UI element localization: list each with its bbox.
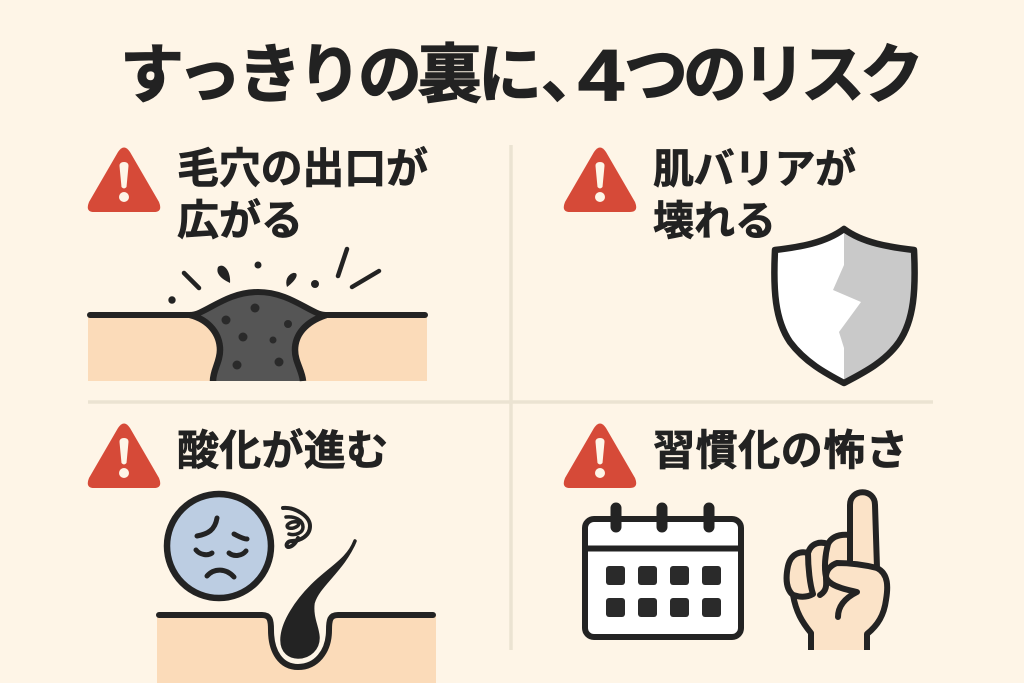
- heading: skin barrier: 肌バリアが: [653, 146, 856, 192]
- panel: skin barrier: [564, 146, 915, 383]
- heading: oxidation: 酸化が進む: [177, 427, 388, 474]
- illustration: enlarged pore: [88, 249, 427, 381]
- icon: warning triangle 3: [88, 424, 160, 488]
- heading: habit: 習慣化の怖さ: [653, 427, 908, 474]
- illustration: skin with hair follicle: [157, 541, 436, 683]
- title: つのリスク: [624, 39, 924, 111]
- icon: calendar: [585, 508, 741, 637]
- panel: oxidation: [88, 424, 436, 683]
- icon: warning triangle 4: [564, 424, 636, 488]
- title: すっきりの裏に: [120, 39, 542, 111]
- panel: pore opening: [88, 145, 428, 381]
- title: 、: [541, 39, 605, 111]
- icon: warning triangle 1: [88, 148, 160, 212]
- heading: pore opening: 広がる: [177, 197, 303, 244]
- icon: swirl: [283, 508, 310, 547]
- icon: warning triangle 2: [564, 148, 636, 212]
- heading: pore opening: 毛穴の出口が: [177, 145, 428, 192]
- heading: skin barrier: 壊れる: [653, 198, 776, 244]
- title: 4: [578, 36, 624, 116]
- title: [120, 36, 924, 116]
- icon: cracked shield: [774, 229, 915, 383]
- illustration: sad face: [167, 494, 271, 598]
- icon: pointing hand: [787, 492, 887, 650]
- panel: habit: [564, 424, 908, 650]
